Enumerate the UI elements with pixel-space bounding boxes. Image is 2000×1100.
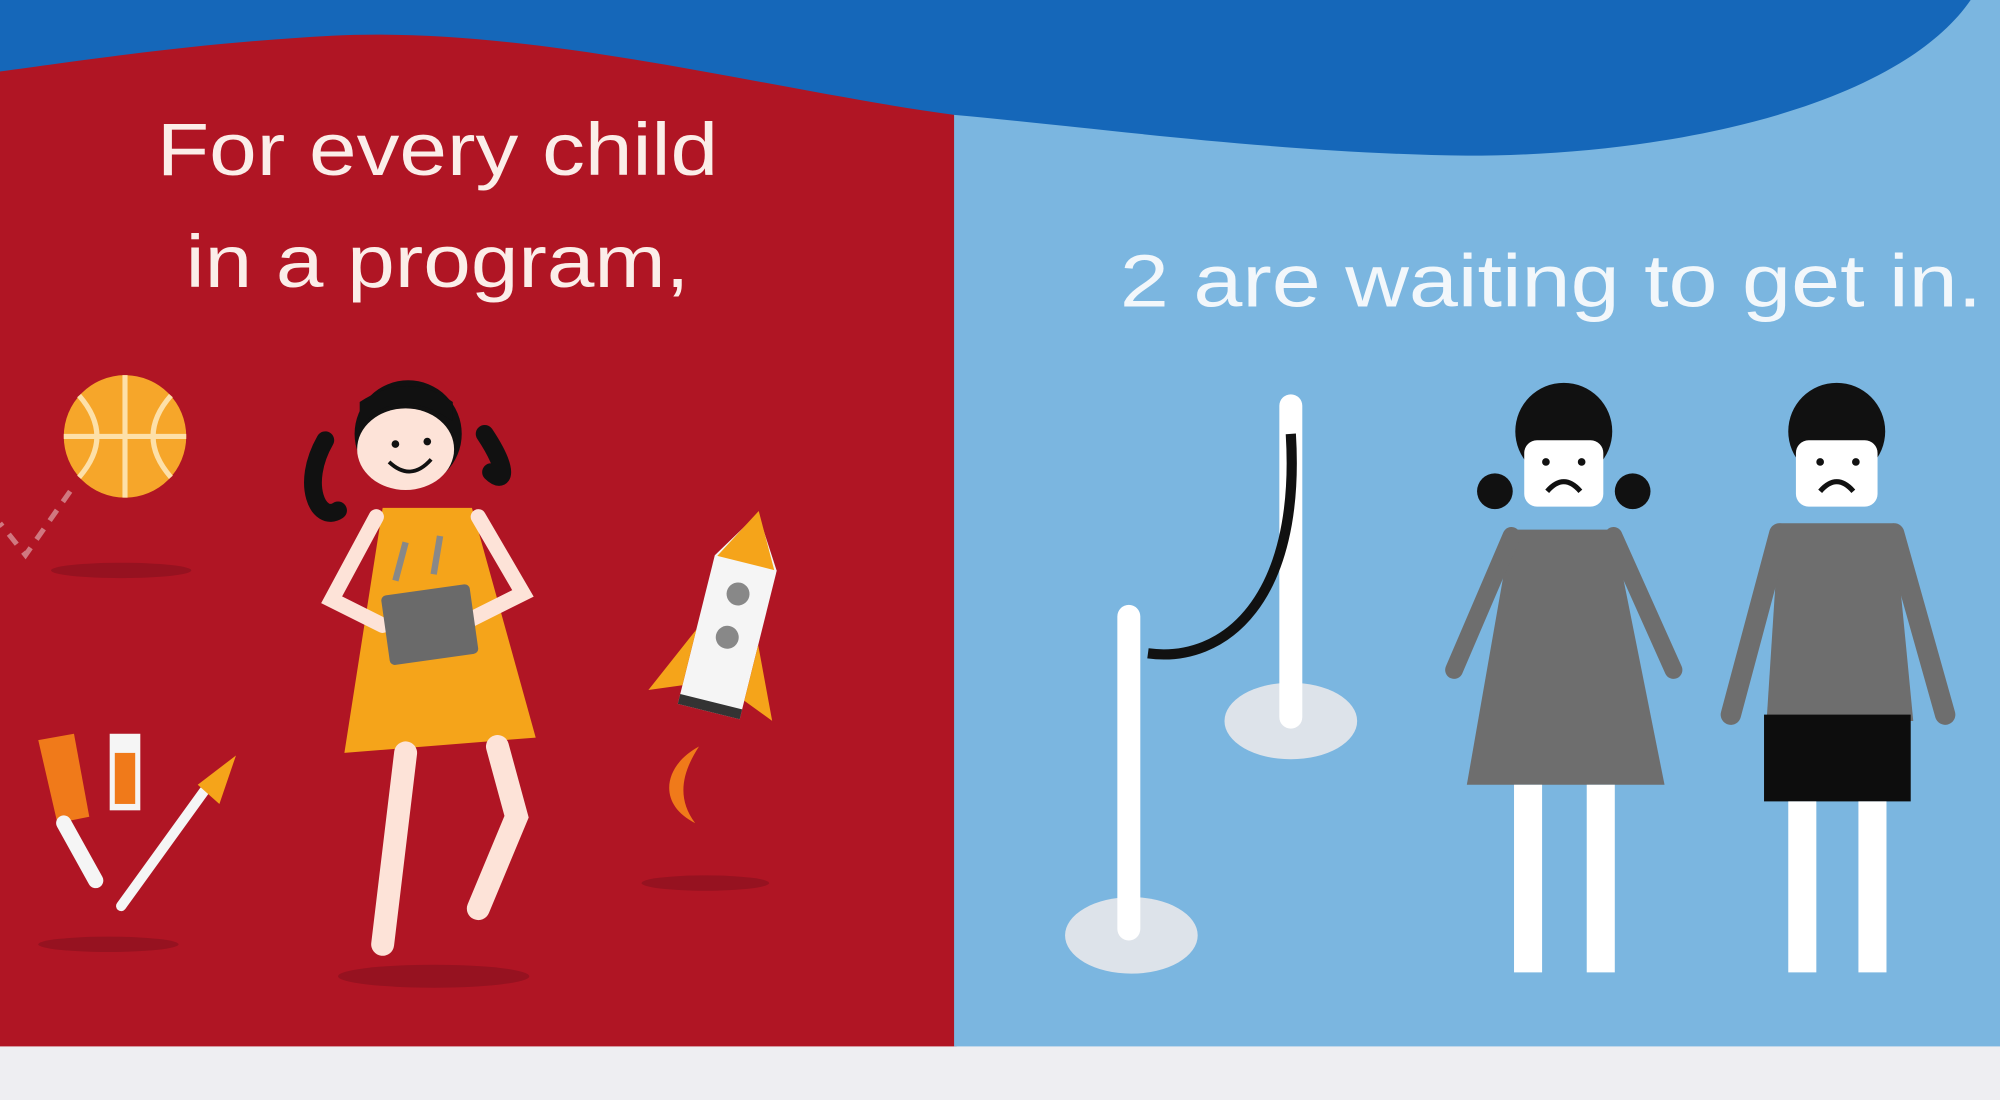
shadows — [38, 563, 769, 988]
icon: rocket — [647, 496, 821, 727]
heading right: 2 are waiting to get in. — [1120, 239, 1982, 322]
panel: light blue right — [954, 0, 2000, 1046]
top wave banner — [0, 0, 1971, 156]
icon: basketball — [0, 375, 186, 555]
icon: sad boy — [1731, 383, 1945, 972]
icon: happy girl — [313, 380, 536, 944]
heading left: For every child — [157, 108, 718, 191]
panel: red left — [0, 0, 957, 1046]
heading left: in a program, — [186, 220, 689, 303]
heading left — [157, 108, 718, 303]
icon: paint tools — [38, 734, 236, 906]
icon: rocket flame — [669, 747, 699, 823]
icon: sad girl — [1454, 383, 1673, 972]
icon: stanchions with rope — [1065, 406, 1357, 974]
